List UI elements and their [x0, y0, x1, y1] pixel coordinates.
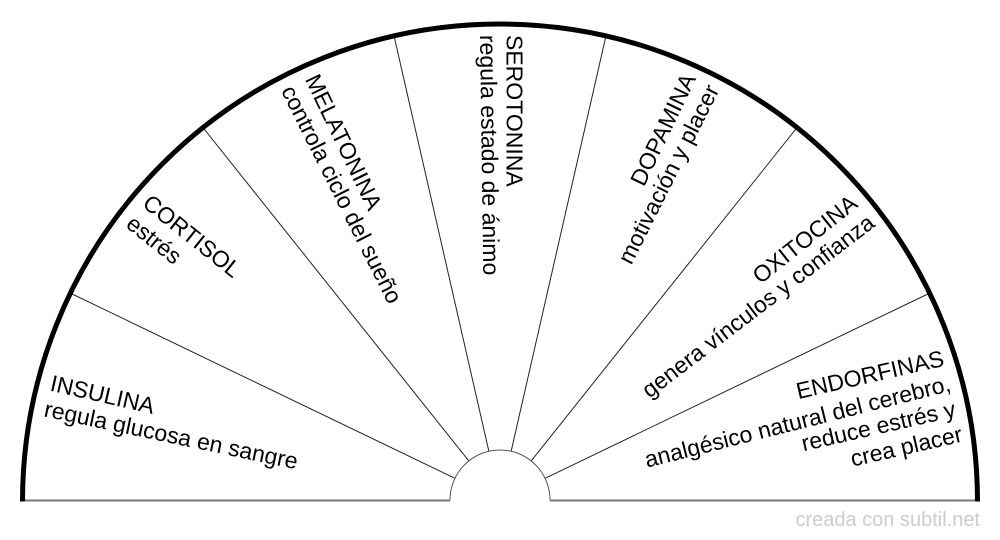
- label: endorfinas: ENDORFINAS: [794, 345, 946, 404]
- label: melatonina: controla ciclo del sueño: [276, 81, 407, 308]
- label: endorfinas: [634, 345, 965, 516]
- label: serotonina: SEROTONINA: [502, 35, 528, 187]
- label: melatonina: MELATONINA: [300, 70, 388, 215]
- watermark: creada con subtil.net: [795, 509, 980, 531]
- label: cortisol: CORTISOL: [138, 189, 246, 283]
- label: serotonina: [475, 35, 528, 275]
- label: insulina: INSULINA: [48, 370, 158, 419]
- label: dopamina: DOPAMINA: [625, 69, 701, 190]
- label: insulina: regula glucosa en sangre: [42, 396, 300, 474]
- label: endorfinas: analgésico natural del cerebro,: [642, 370, 953, 472]
- label: endorfinas: crea placer: [848, 421, 965, 472]
- label: oxitocina: OXITOCINA: [747, 189, 863, 289]
- label: cortisol: estrés: [122, 210, 187, 269]
- label: endorfinas: reduce estrés y: [799, 396, 958, 456]
- label: dopamina: motivación y placer: [613, 80, 724, 268]
- label: oxitocina: genera vínculos y confianza: [637, 209, 879, 403]
- label: serotonina: regula estado de ánimo: [475, 35, 504, 275]
- inner arc: [450, 450, 550, 500]
